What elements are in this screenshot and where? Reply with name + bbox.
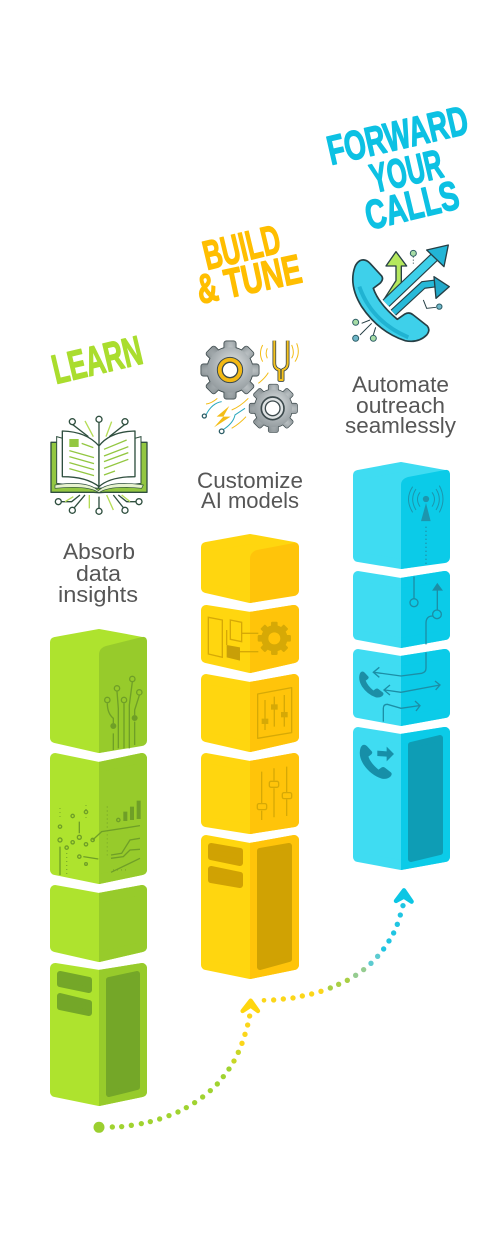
icon: phone with forward arrows: [353, 245, 449, 341]
heading: learn: LEARN: [47, 327, 147, 393]
block 3: blue phone routing block: [358, 652, 445, 722]
description: learn: Absorb: [63, 539, 135, 564]
icon: open book with circuits: [51, 416, 147, 514]
block 2: blue connector block: [358, 576, 445, 644]
block 2: yellow gear diagram block: [206, 610, 294, 668]
block 5: yellow base block: [206, 840, 294, 974]
heading: forward your calls: CALLS: [360, 172, 463, 239]
heading: build and tune: [192, 216, 306, 313]
block 4: blue base block: [358, 732, 445, 865]
block 4: green base block: [55, 968, 142, 1101]
column: learn: [47, 327, 147, 1101]
heading: build and tune: & TUNE: [192, 246, 306, 313]
block 4: yellow sliders block: [206, 758, 294, 829]
block 1: blue antenna block: [358, 467, 450, 569]
dotted arrow: green to yellow: [94, 1001, 258, 1133]
description: forward your calls: [345, 372, 456, 438]
heading: forward your calls: YOUR: [366, 141, 447, 202]
description: learn: insights: [58, 582, 138, 607]
block 1: yellow top block: [206, 539, 299, 603]
heading: forward your calls: [323, 97, 472, 239]
description: forward your calls: outreach: [356, 393, 445, 418]
block 2: green data block: [55, 758, 142, 879]
block 3: green plain block: [55, 890, 142, 957]
description: forward your calls: seamlessly: [345, 413, 456, 438]
description: learn: [58, 539, 138, 607]
dotted arrow: yellow to blue: [262, 890, 412, 1003]
column: forward your calls: [323, 97, 472, 865]
heading: build and tune: BUILD: [198, 216, 285, 279]
description: build and tune: Customize: [197, 468, 303, 493]
description: build and tune: AI models: [201, 488, 299, 513]
icon: gears and tuning fork: [201, 341, 298, 434]
block 1: green circuit block: [55, 634, 147, 753]
description: learn: data: [76, 561, 122, 586]
infographic canvas: [50, 107, 468, 1133]
description: build and tune: [197, 468, 303, 513]
description: forward your calls: Automate: [352, 372, 449, 397]
column: build and tune: [192, 216, 306, 974]
block 3: yellow slider panel block: [206, 679, 294, 747]
